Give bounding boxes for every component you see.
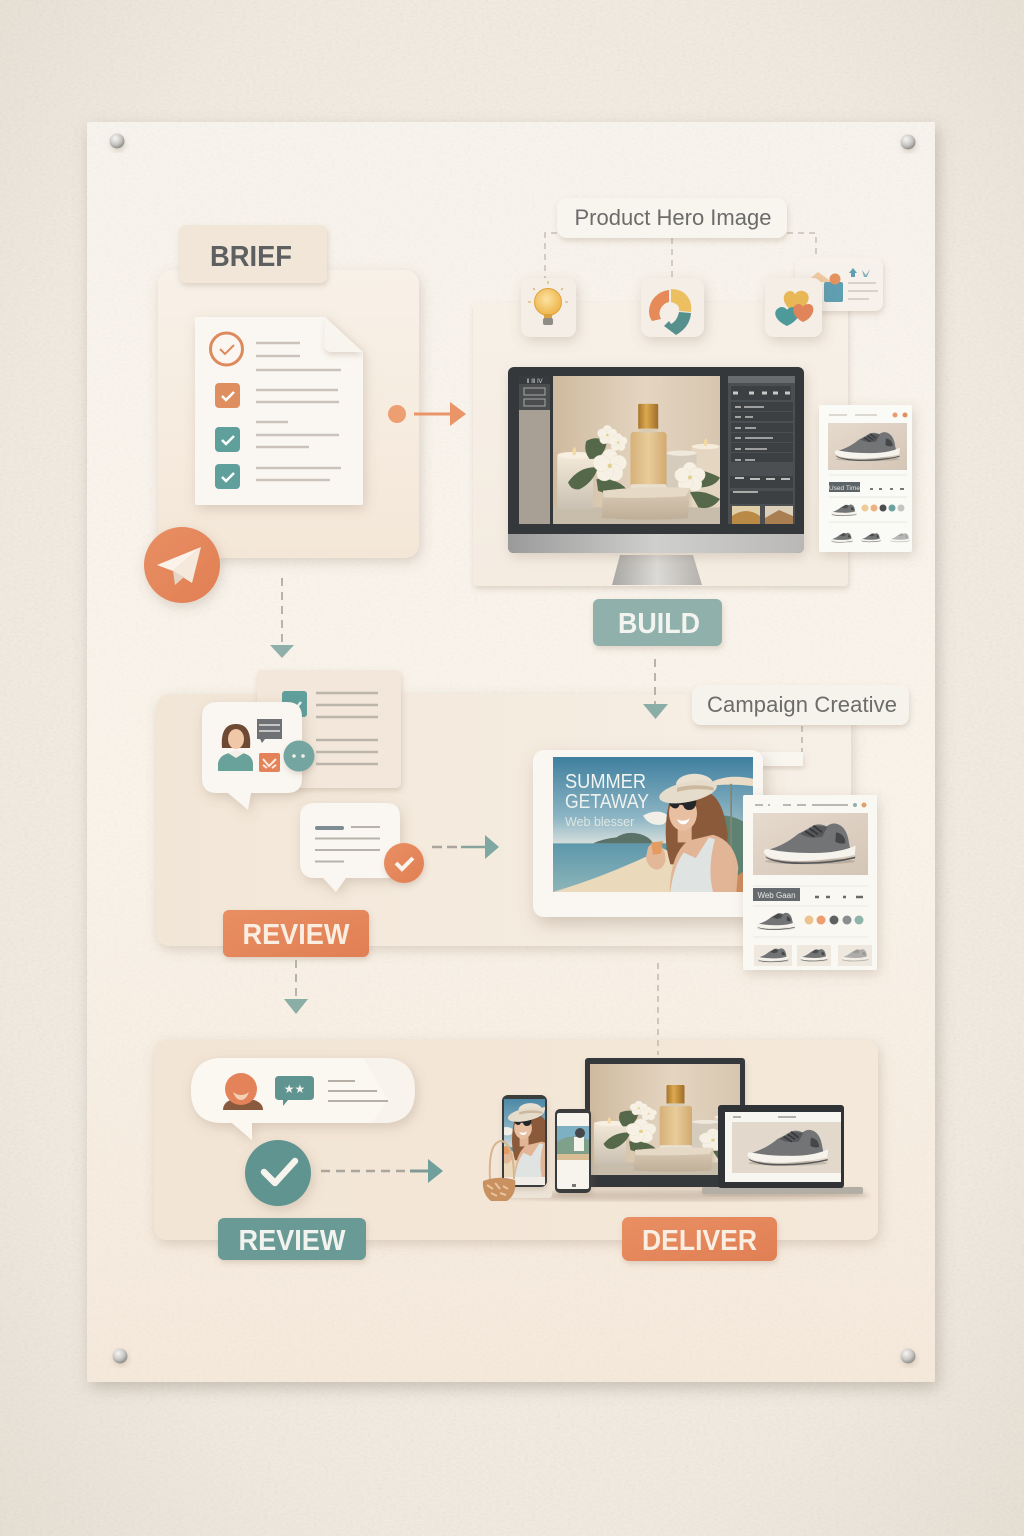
icon: orange checkbox: [215, 383, 240, 408]
icon: send paper plane: [144, 527, 220, 603]
panel: review: [156, 659, 909, 970]
mounting pin top right: [900, 134, 916, 150]
icon: orange check: [384, 843, 424, 883]
campaign headline line two: GETAWAY: [565, 791, 649, 813]
build heading tag: [593, 599, 722, 646]
backing board: [87, 122, 935, 1382]
device: basket: [483, 1141, 515, 1201]
mounting pin bottom right: [900, 1348, 916, 1364]
final review heading tag: [218, 1218, 366, 1260]
panel: brief: [144, 225, 419, 603]
mounting pin top left: [110, 134, 124, 148]
review heading tag: [223, 910, 369, 957]
thumbnails: [732, 506, 793, 524]
review heading tag: REVIEW: [242, 919, 350, 951]
icon: hearts: [765, 278, 822, 337]
icon: teal checkbox: [215, 464, 240, 489]
icon: clock check: [210, 333, 242, 365]
left toolbar: [519, 376, 550, 524]
build heading tag: BUILD: [618, 608, 700, 640]
icon: star rating: [275, 1076, 314, 1106]
device: laptop: [702, 1105, 863, 1194]
campaign creative label: [692, 685, 909, 725]
device: desktop monitor: [585, 1058, 745, 1187]
hero image: perfume bottle scene: [553, 376, 720, 524]
campaign sub-line: Web blesser: [565, 815, 634, 829]
campaign headline: SUMMER: [565, 771, 646, 793]
monitor stand: [612, 555, 702, 585]
deliver heading tag: [622, 1217, 777, 1261]
connector line from campaign label: [801, 726, 803, 752]
brief heading tag: [179, 225, 327, 283]
arrow: review to final review: [284, 960, 308, 1014]
arrow: brief to review: [270, 578, 294, 658]
panel: deliver: [154, 963, 878, 1261]
approval comment bubble: [300, 803, 424, 892]
connector to devices: [657, 963, 659, 1055]
product hero image label: Product Hero Image: [574, 205, 772, 230]
icon: approval badge: [259, 753, 280, 772]
deliver heading tag: DELIVER: [642, 1225, 757, 1257]
icon: client avatar: [223, 1073, 263, 1110]
icon: approved check: [245, 1140, 311, 1206]
website card: shoe product: [819, 405, 912, 552]
icon: comment list: [257, 719, 282, 743]
product hero image label: [557, 198, 787, 238]
connector lines from hero label: [545, 233, 816, 279]
creative strip behind tablet: [740, 752, 803, 766]
checklist text lines: [256, 343, 341, 480]
device group: [441, 1058, 870, 1201]
icon: light bulb: [521, 278, 576, 337]
card: palette behind hearts: [795, 258, 883, 311]
reviewer speech bubble: [202, 702, 314, 810]
right settings panel: [728, 376, 795, 524]
device: phone with campaign: [441, 1093, 567, 1198]
brief heading tag: BRIEF: [210, 241, 292, 273]
icon: star rating: ★★: [284, 1082, 305, 1096]
monitor body: [508, 367, 804, 553]
arrow: brief to build: [388, 402, 466, 426]
arrow: build to review: [643, 659, 668, 719]
campaign creative label: Campaign Creative: [707, 692, 897, 717]
client feedback bubble: [191, 1058, 415, 1140]
arrow: review to deliver: [321, 1159, 443, 1183]
notes card behind: [257, 670, 401, 788]
website card: large shoe: Web Gaan: [757, 891, 796, 900]
feedback text lines: [328, 1081, 388, 1101]
icon: reviewer portrait: [218, 724, 253, 771]
website card: shoe product: Used Time: [829, 485, 860, 492]
mounting pin bottom left: [112, 1348, 128, 1364]
final review heading tag: REVIEW: [238, 1225, 346, 1257]
arrow: review to campaign: [432, 835, 499, 859]
left toolbar: Ⅱ Ⅲ Ⅳ: [527, 379, 543, 385]
panel: build: [473, 198, 912, 646]
icon: more options: [284, 740, 314, 772]
icon: colour wheel: [641, 278, 704, 337]
website card: large shoe: [743, 795, 877, 970]
icon: teal checkbox: [215, 427, 240, 452]
monitor with editing app: [508, 367, 804, 585]
device: small phone: [555, 1109, 591, 1193]
campaign tablet: [533, 750, 763, 917]
checklist document: [195, 317, 363, 505]
